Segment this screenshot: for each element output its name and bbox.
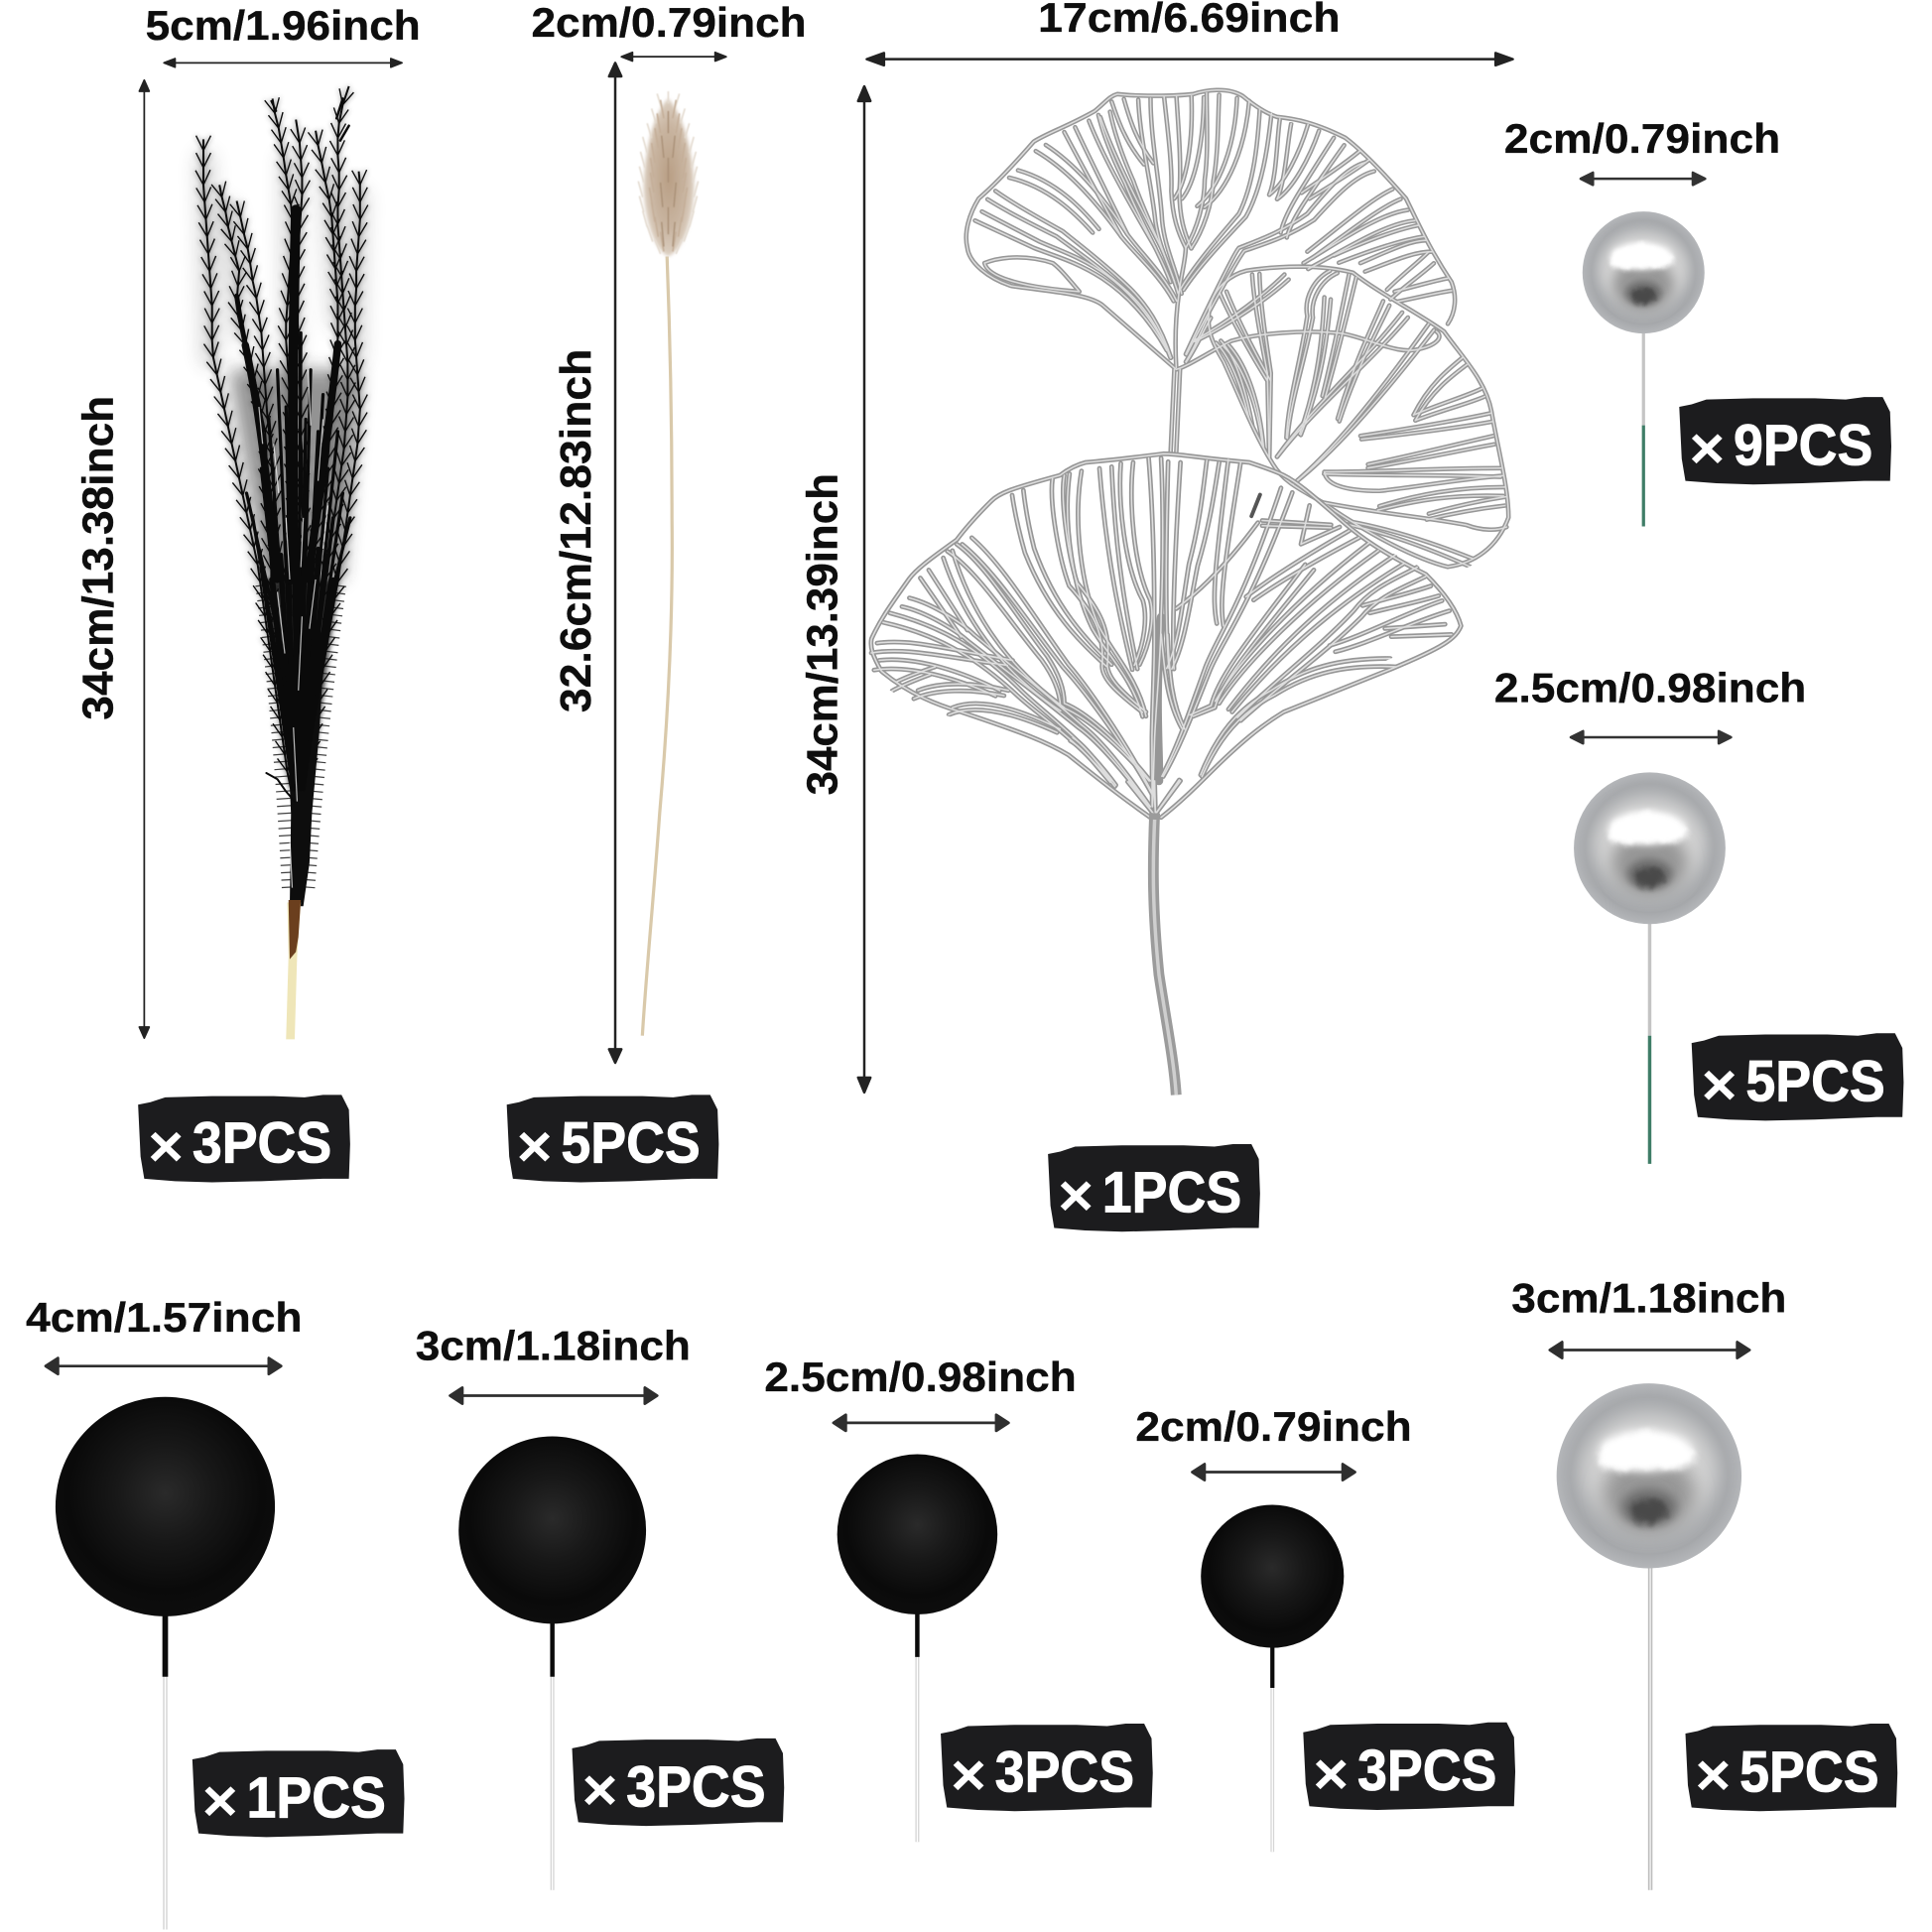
badge: x9PCS: × bbox=[1689, 415, 1725, 481]
icon: stick bbox=[1648, 1566, 1652, 1890]
arrow: bunny tail height bbox=[609, 63, 621, 1063]
badge: x1PCS: 1PCS bbox=[247, 1765, 386, 1830]
icon: upper ginkgo leaves bbox=[966, 84, 1514, 569]
panel: black pick 3cm bbox=[416, 1322, 784, 1890]
badge: x5PCS bbox=[507, 1095, 718, 1183]
icon: black ball bbox=[837, 1455, 997, 1614]
badge: x3PCS: × bbox=[1313, 1740, 1349, 1807]
icon: lower ginkgo leaf bbox=[865, 448, 1461, 1095]
badge: x9PCS: 9PCS bbox=[1734, 413, 1872, 477]
icon: stick bbox=[551, 1617, 554, 1890]
panel: small silver pick 2cm bbox=[1504, 115, 1891, 527]
badge: x3PCS: 3PCS bbox=[193, 1111, 331, 1176]
icon: silver ball bbox=[1574, 772, 1726, 924]
icon: stick bbox=[916, 1609, 919, 1842]
panel: silver ginkgo leaf spray bbox=[800, 0, 1514, 1231]
label: ginkgo height: 34cm/13.39inch bbox=[800, 473, 847, 795]
badge: x5PCS bbox=[1685, 1724, 1897, 1811]
badge: x5PCS: 5PCS bbox=[1745, 1050, 1885, 1114]
icon: stick bbox=[164, 1609, 167, 1930]
badge: x3PCS bbox=[1303, 1723, 1515, 1810]
icon: bunny tail bbox=[638, 91, 699, 1036]
icon: black ball bbox=[458, 1437, 646, 1623]
panel: black pick 2.5cm bbox=[764, 1353, 1153, 1842]
badge: x3PCS: × bbox=[581, 1756, 617, 1823]
badge: x3PCS: × bbox=[951, 1741, 986, 1808]
badge: x3PCS bbox=[573, 1739, 784, 1826]
label: pampas height: 34cm/13.38inch bbox=[75, 396, 123, 720]
label: 3cm silver: 3cm/1.18inch bbox=[1511, 1275, 1786, 1322]
label: 2.5cm: 2.5cm/0.98inch bbox=[764, 1353, 1077, 1400]
badge: x5PCS: 5PCS bbox=[1739, 1739, 1879, 1804]
badge: x3PCS: 3PCS bbox=[995, 1739, 1134, 1804]
panel: black pick 4cm bbox=[26, 1294, 405, 1930]
arrow: ginkgo width bbox=[866, 53, 1513, 65]
panel: bunny tail grass bbox=[507, 0, 807, 1183]
arrow: 2cm silver pick bbox=[1581, 173, 1705, 185]
badge: x5PCS: × bbox=[517, 1112, 553, 1179]
arrow: 3cm silver bbox=[1550, 1342, 1749, 1358]
arrow: ginkgo height bbox=[858, 86, 870, 1093]
label: 2.5cm silver pick: 2.5cm/0.98inch bbox=[1494, 665, 1806, 711]
panel: silver pick 2.5cm bbox=[1494, 665, 1903, 1164]
icon: silver pick stem bbox=[1642, 330, 1645, 527]
label: 3cm: 3cm/1.18inch bbox=[416, 1322, 691, 1368]
arrow: 3cm bbox=[451, 1387, 657, 1404]
arrow: bunny tail width bbox=[621, 53, 726, 62]
badge: x9PCS bbox=[1679, 397, 1891, 484]
badge: x1PCS: × bbox=[202, 1767, 238, 1834]
panel: silver pick 3cm bbox=[1511, 1275, 1897, 1890]
badge: x1PCS: × bbox=[1058, 1162, 1094, 1228]
label: 4cm: 4cm/1.57inch bbox=[26, 1294, 302, 1341]
badge: x3PCS: × bbox=[148, 1112, 184, 1179]
arrow: pampas width bbox=[164, 59, 402, 67]
badge: x5PCS bbox=[1692, 1033, 1903, 1120]
label: pampas width: 5cm/1.96inch bbox=[146, 2, 421, 49]
badge: x5PCS: × bbox=[1695, 1741, 1731, 1808]
pampas stalk bbox=[286, 900, 301, 1039]
arrow: 4cm bbox=[46, 1358, 281, 1374]
icon: silver pick stem bbox=[1648, 921, 1651, 1164]
icon: black ball bbox=[1201, 1504, 1344, 1648]
panel: black pampas grass bbox=[75, 2, 421, 1183]
arrow: 2cm bbox=[1192, 1464, 1355, 1481]
arrow: 2.5cm silver pick bbox=[1571, 731, 1731, 743]
label: bunny tail height: 32.6cm/12.83inch bbox=[553, 349, 600, 712]
icon: silver ball bbox=[1557, 1383, 1741, 1568]
badge: x5PCS: × bbox=[1702, 1051, 1738, 1117]
badge: x3PCS: 3PCS bbox=[626, 1754, 766, 1819]
label: 2cm silver pick: 2cm/0.79inch bbox=[1504, 115, 1780, 162]
badge: x5PCS: 5PCS bbox=[561, 1111, 701, 1176]
badge: x1PCS bbox=[193, 1749, 405, 1837]
icon: silver ball bbox=[1583, 211, 1705, 333]
icon: pampas plume bbox=[203, 86, 360, 1039]
badge: x1PCS: 1PCS bbox=[1102, 1160, 1241, 1224]
arrow: 2.5cm bbox=[834, 1415, 1008, 1431]
badge: x3PCS bbox=[941, 1724, 1153, 1811]
icon: black ball bbox=[56, 1397, 275, 1616]
badge: x1PCS bbox=[1048, 1144, 1260, 1231]
panel: black pick 2cm bbox=[1135, 1403, 1515, 1852]
badge: x3PCS bbox=[138, 1095, 350, 1183]
badge: x3PCS: 3PCS bbox=[1357, 1739, 1496, 1803]
label: 2cm: 2cm/0.79inch bbox=[1135, 1403, 1412, 1450]
label: bunny tail width: 2cm/0.79inch bbox=[532, 0, 807, 46]
arrow: pampas height bbox=[139, 80, 149, 1038]
icon: stick bbox=[1271, 1642, 1274, 1852]
